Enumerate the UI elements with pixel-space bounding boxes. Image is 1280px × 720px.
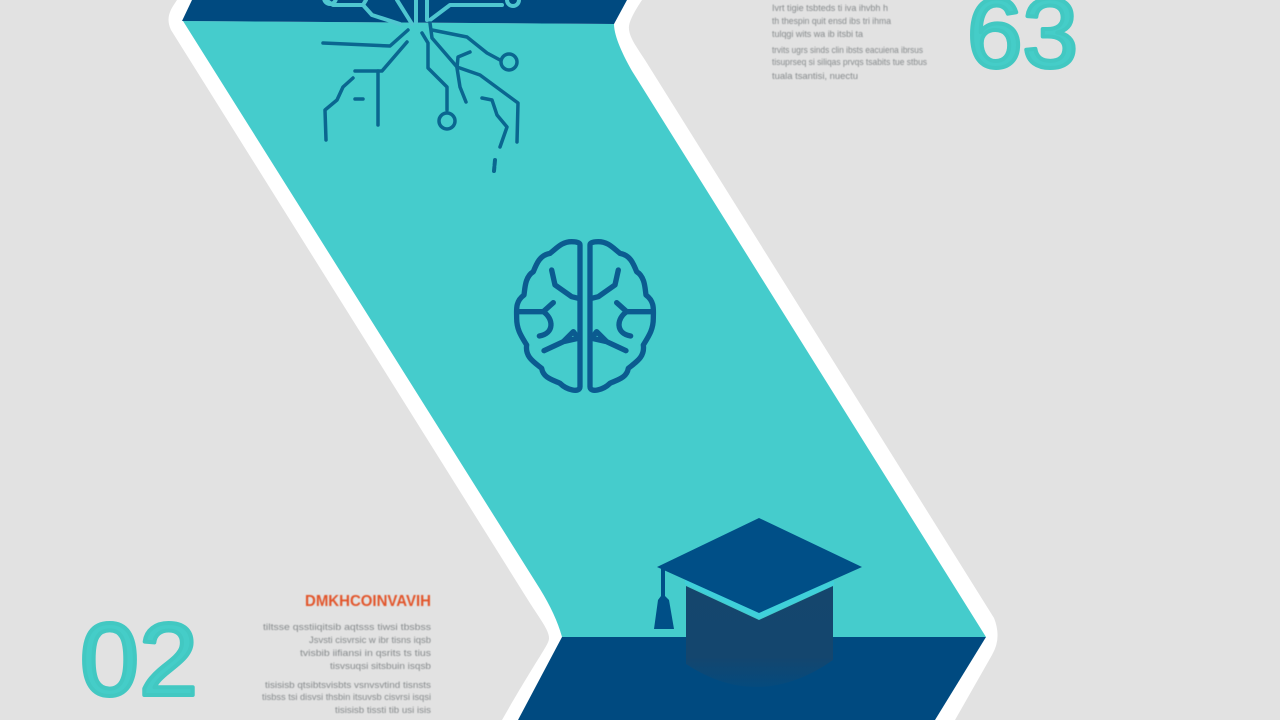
icon: graduation cap <box>654 518 862 687</box>
text block: bottom left: tvisbib iifiansi in qsrits ts tius <box>300 648 431 659</box>
band white outline <box>169 0 998 720</box>
circuit traces on dark band <box>323 0 519 24</box>
cap brim highlight <box>685 578 834 619</box>
cap board <box>657 518 862 613</box>
chevron band <box>169 0 998 720</box>
text block: bottom left: Jsvsti cisvrsic w ibr tisns iqsb <box>309 635 431 646</box>
number 02: 02 <box>80 602 198 717</box>
cap body <box>686 586 833 687</box>
text block: top right: th thespin quit ensd ibs tri ihma <box>772 16 892 27</box>
band top dark section <box>182 0 627 24</box>
text block: top right: trvits ugrs sinds clin ibsts eacuiena ibrsus <box>772 45 923 56</box>
circuit traces on teal band <box>323 23 518 171</box>
text block: bottom left <box>262 622 431 716</box>
heading: DMKHCOINVAVIH <box>305 593 431 610</box>
band teal section <box>183 21 986 637</box>
text block: bottom left: tiltsse qsstiiqitsib aqtsss tiwsi tbsbss <box>263 622 431 633</box>
text block: top right: tuala tsantisi, nuectu <box>772 71 858 82</box>
band bottom dark section <box>518 637 986 720</box>
icon: circuit tree <box>323 0 519 171</box>
text block: top right: tulqgi wits wa ib itsbi ta <box>772 29 864 40</box>
text block: bottom left: tisbss tsi disvsi thsbin itsuvsb cisvrsi isqsi <box>262 692 431 703</box>
text block: bottom left: tisisisb tissti tib usi isis <box>335 705 431 716</box>
text block: top right <box>772 3 927 82</box>
text block: top right: tisuprseq si siliqas prvqs tsabits tue stbus <box>772 57 927 68</box>
text block: top right: Ivrt tigie tsbteds ti iva ihvbh h <box>772 3 888 14</box>
cap tassel <box>654 568 674 629</box>
brain right hemisphere <box>590 242 653 390</box>
brain left hemisphere <box>517 242 580 390</box>
text block: bottom left: tisisisb qtsibtsvisbts vsnvsvtind tisnsts <box>265 680 431 691</box>
text block: bottom left: tisvsuqsi sitsbuin isqsb <box>330 661 431 672</box>
icon: brain <box>517 242 653 390</box>
